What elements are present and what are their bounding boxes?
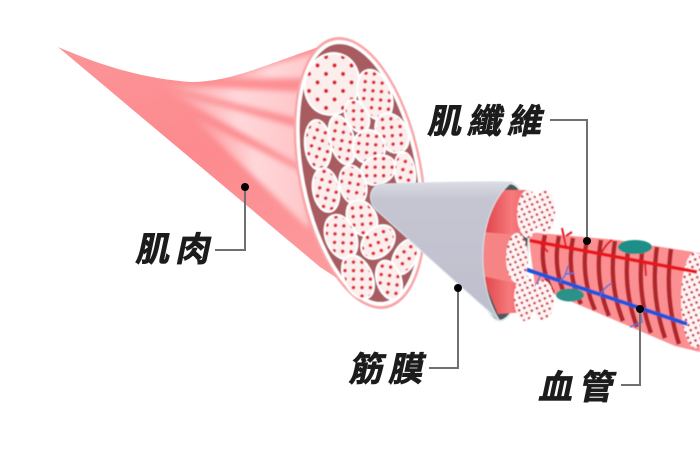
label: fascia <box>346 284 462 389</box>
sheath cone <box>370 182 512 320</box>
fiber stripes <box>543 235 679 344</box>
leader line <box>621 309 640 385</box>
teal nucleus bottom <box>556 288 584 302</box>
muscle bundles <box>298 47 424 304</box>
label: muscle fiber <box>425 103 591 245</box>
label text: 肌肉 <box>133 231 221 269</box>
fiber body <box>528 232 700 352</box>
red vessel <box>527 228 697 276</box>
leader dot <box>241 183 249 191</box>
blue vessel <box>525 266 687 327</box>
teal nucleus top <box>618 240 652 254</box>
label: muscle <box>133 183 249 269</box>
leader line <box>215 187 245 250</box>
label text: 肌纖維 <box>425 103 553 141</box>
muscle fiber <box>525 228 700 352</box>
leader line <box>550 120 587 241</box>
label text: 筋膜 <box>346 351 434 389</box>
label: blood vessel <box>536 305 644 407</box>
fiber end <box>681 252 700 348</box>
muscle <box>58 36 424 310</box>
leader dot <box>454 284 462 292</box>
fascia sheath <box>370 181 555 323</box>
muscle body <box>58 40 392 308</box>
label text: 血管 <box>536 369 624 407</box>
leader dot <box>583 237 591 245</box>
fiber bundles <box>482 190 555 321</box>
leader dot <box>636 305 644 313</box>
muscle cross-section <box>273 26 447 320</box>
sheath rim shadow <box>476 181 534 323</box>
muscle highlights <box>174 51 312 230</box>
leader line <box>429 288 458 368</box>
